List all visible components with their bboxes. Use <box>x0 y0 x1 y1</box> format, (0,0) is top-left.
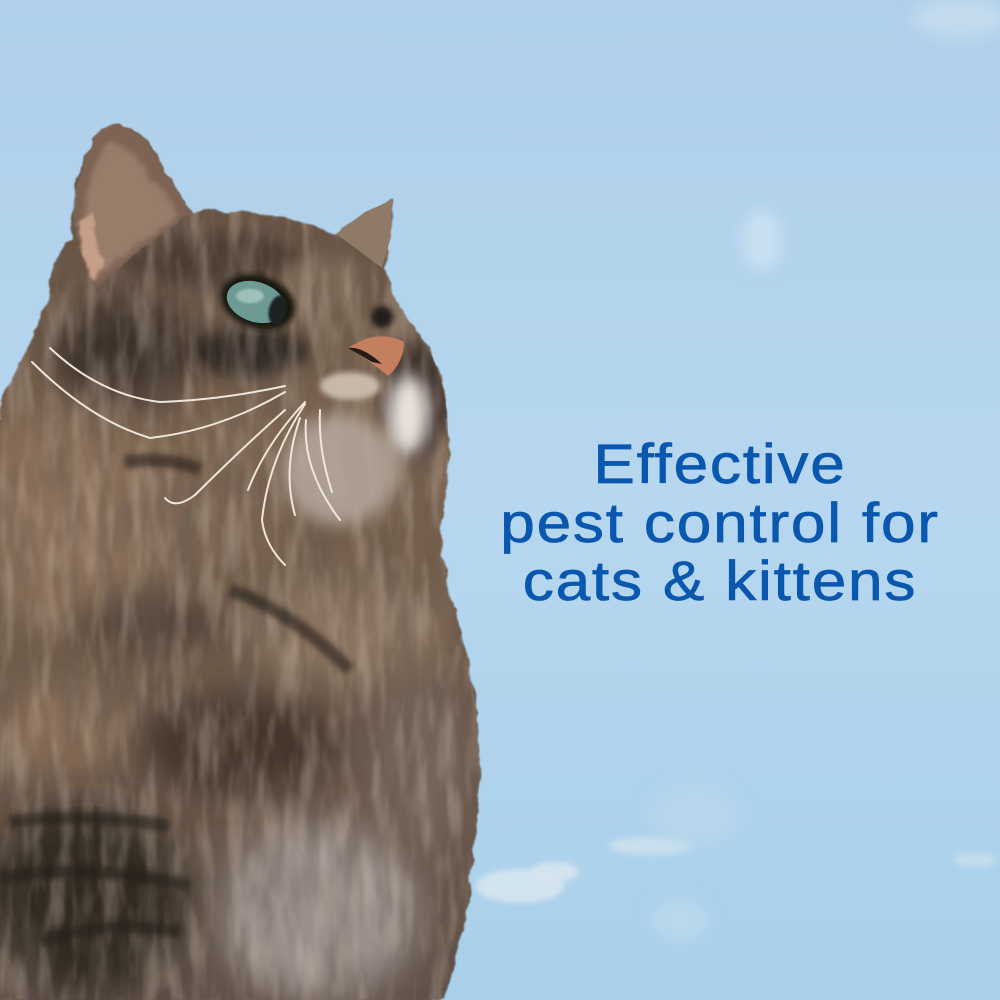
right ear <box>336 200 392 268</box>
cat body with rough fur edge <box>0 126 480 1000</box>
eye <box>214 266 393 338</box>
whiskers <box>32 348 340 565</box>
headline <box>500 432 940 612</box>
clouds <box>476 0 1000 940</box>
cat <box>0 120 490 1000</box>
nose <box>348 336 404 376</box>
headline: Effective <box>593 432 847 495</box>
muzzle and chest <box>282 372 428 525</box>
fur texture <box>0 120 490 1000</box>
headline: cats & kittens <box>523 549 917 612</box>
cat body base filling the frame edges <box>0 420 432 1000</box>
fur shading <box>0 120 490 1000</box>
left ear <box>76 125 192 288</box>
headline: pest control for <box>500 490 940 554</box>
